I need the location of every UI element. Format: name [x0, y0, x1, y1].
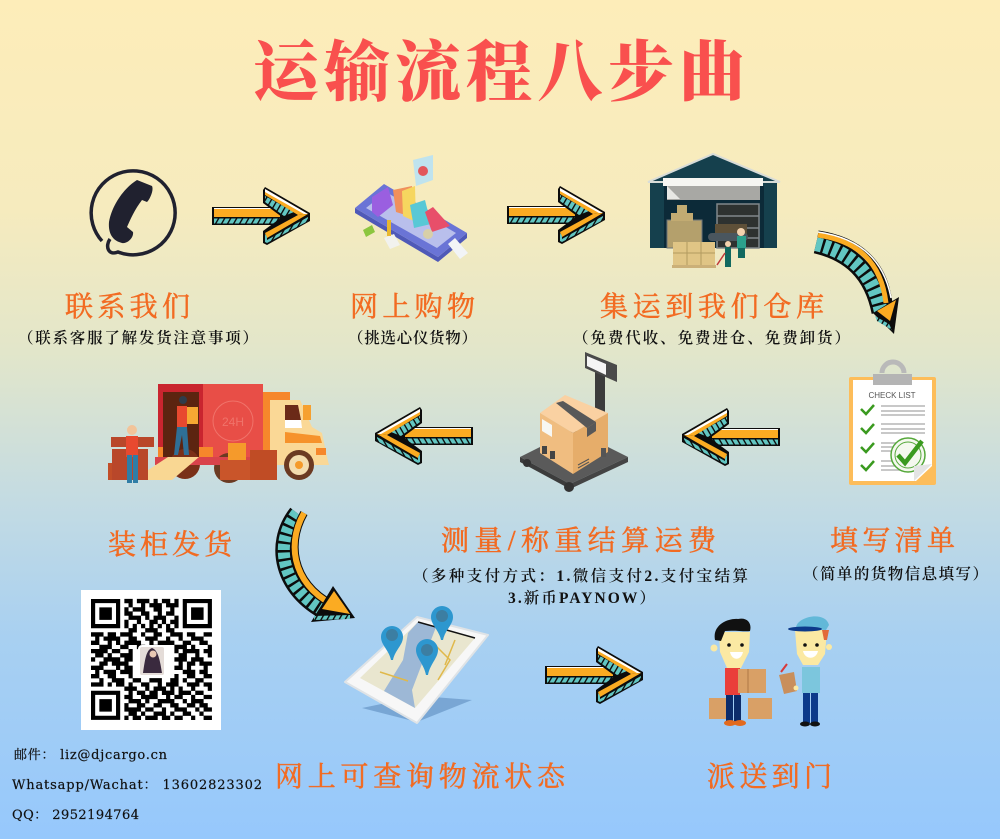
icon: delivery truck — [108, 384, 329, 483]
contact: email: 邮件： liz@djcargo.cn — [14, 747, 168, 763]
subtext: online shopping: （挑选心仪货物） — [348, 328, 477, 347]
icon: warehouse — [648, 154, 780, 268]
icon: check list clipboard — [849, 362, 936, 485]
arrow: curved step 3 to 4 — [816, 232, 899, 334]
heading: measure and weigh: 测量/称重结算运费 — [441, 525, 717, 557]
contact: whatsapp: Whatsapp/Wachat： 13602823302 — [12, 778, 262, 793]
heading: fill in list: 填写清单 — [830, 525, 955, 557]
subtext: contact us: （联系客服了解发货注意事项） — [18, 328, 258, 347]
icon: delivery truck: 24H — [222, 415, 244, 429]
heading: door delivery: 派送到门 — [707, 761, 832, 793]
subtext: payment methods line two: 3.新币PAYNOW） — [508, 589, 655, 607]
subtext: warehouse: （免费代收、免费进仓、免费卸货） — [573, 328, 850, 347]
icon: online shopping phone — [355, 155, 468, 262]
heading: online shopping: 网上购物 — [350, 291, 475, 323]
title: 运输流程八步曲 — [253, 37, 745, 110]
icon: delivery people — [709, 616, 832, 726]
arrow: step 5 to 6 (leftward) — [375, 407, 473, 465]
heading: load and ship: 装柜发货 — [108, 529, 234, 561]
arrow: step 7 to 8 — [545, 646, 643, 704]
arrow: step 1 to 2 — [212, 187, 310, 245]
subtext: payment methods: （多种支付方式：1.微信支付2.支付宝结算 — [413, 566, 748, 585]
icon: weighing scale with parcel — [520, 352, 628, 492]
arrow: step 2 to 3 — [507, 186, 605, 244]
arrow: curved step 6 to 7 — [284, 513, 355, 622]
heading: online tracking: 网上可查询物流状态 — [275, 761, 566, 793]
icon: tablet with map pins — [345, 606, 488, 723]
heading: ship to warehouse: 集运到我们仓库 — [600, 291, 824, 323]
QR code — [81, 590, 221, 730]
heading: contact us: 联系我们 — [65, 291, 190, 323]
icon: telephone — [91, 171, 175, 255]
subtext: fill in list: （简单的货物信息填写） — [803, 564, 988, 583]
icon: check list clipboard: CHECK LIST — [868, 391, 916, 400]
contact: QQ: QQ： 2952194764 — [12, 808, 139, 823]
arrow: step 4 to 5 (leftward) — [682, 408, 780, 466]
